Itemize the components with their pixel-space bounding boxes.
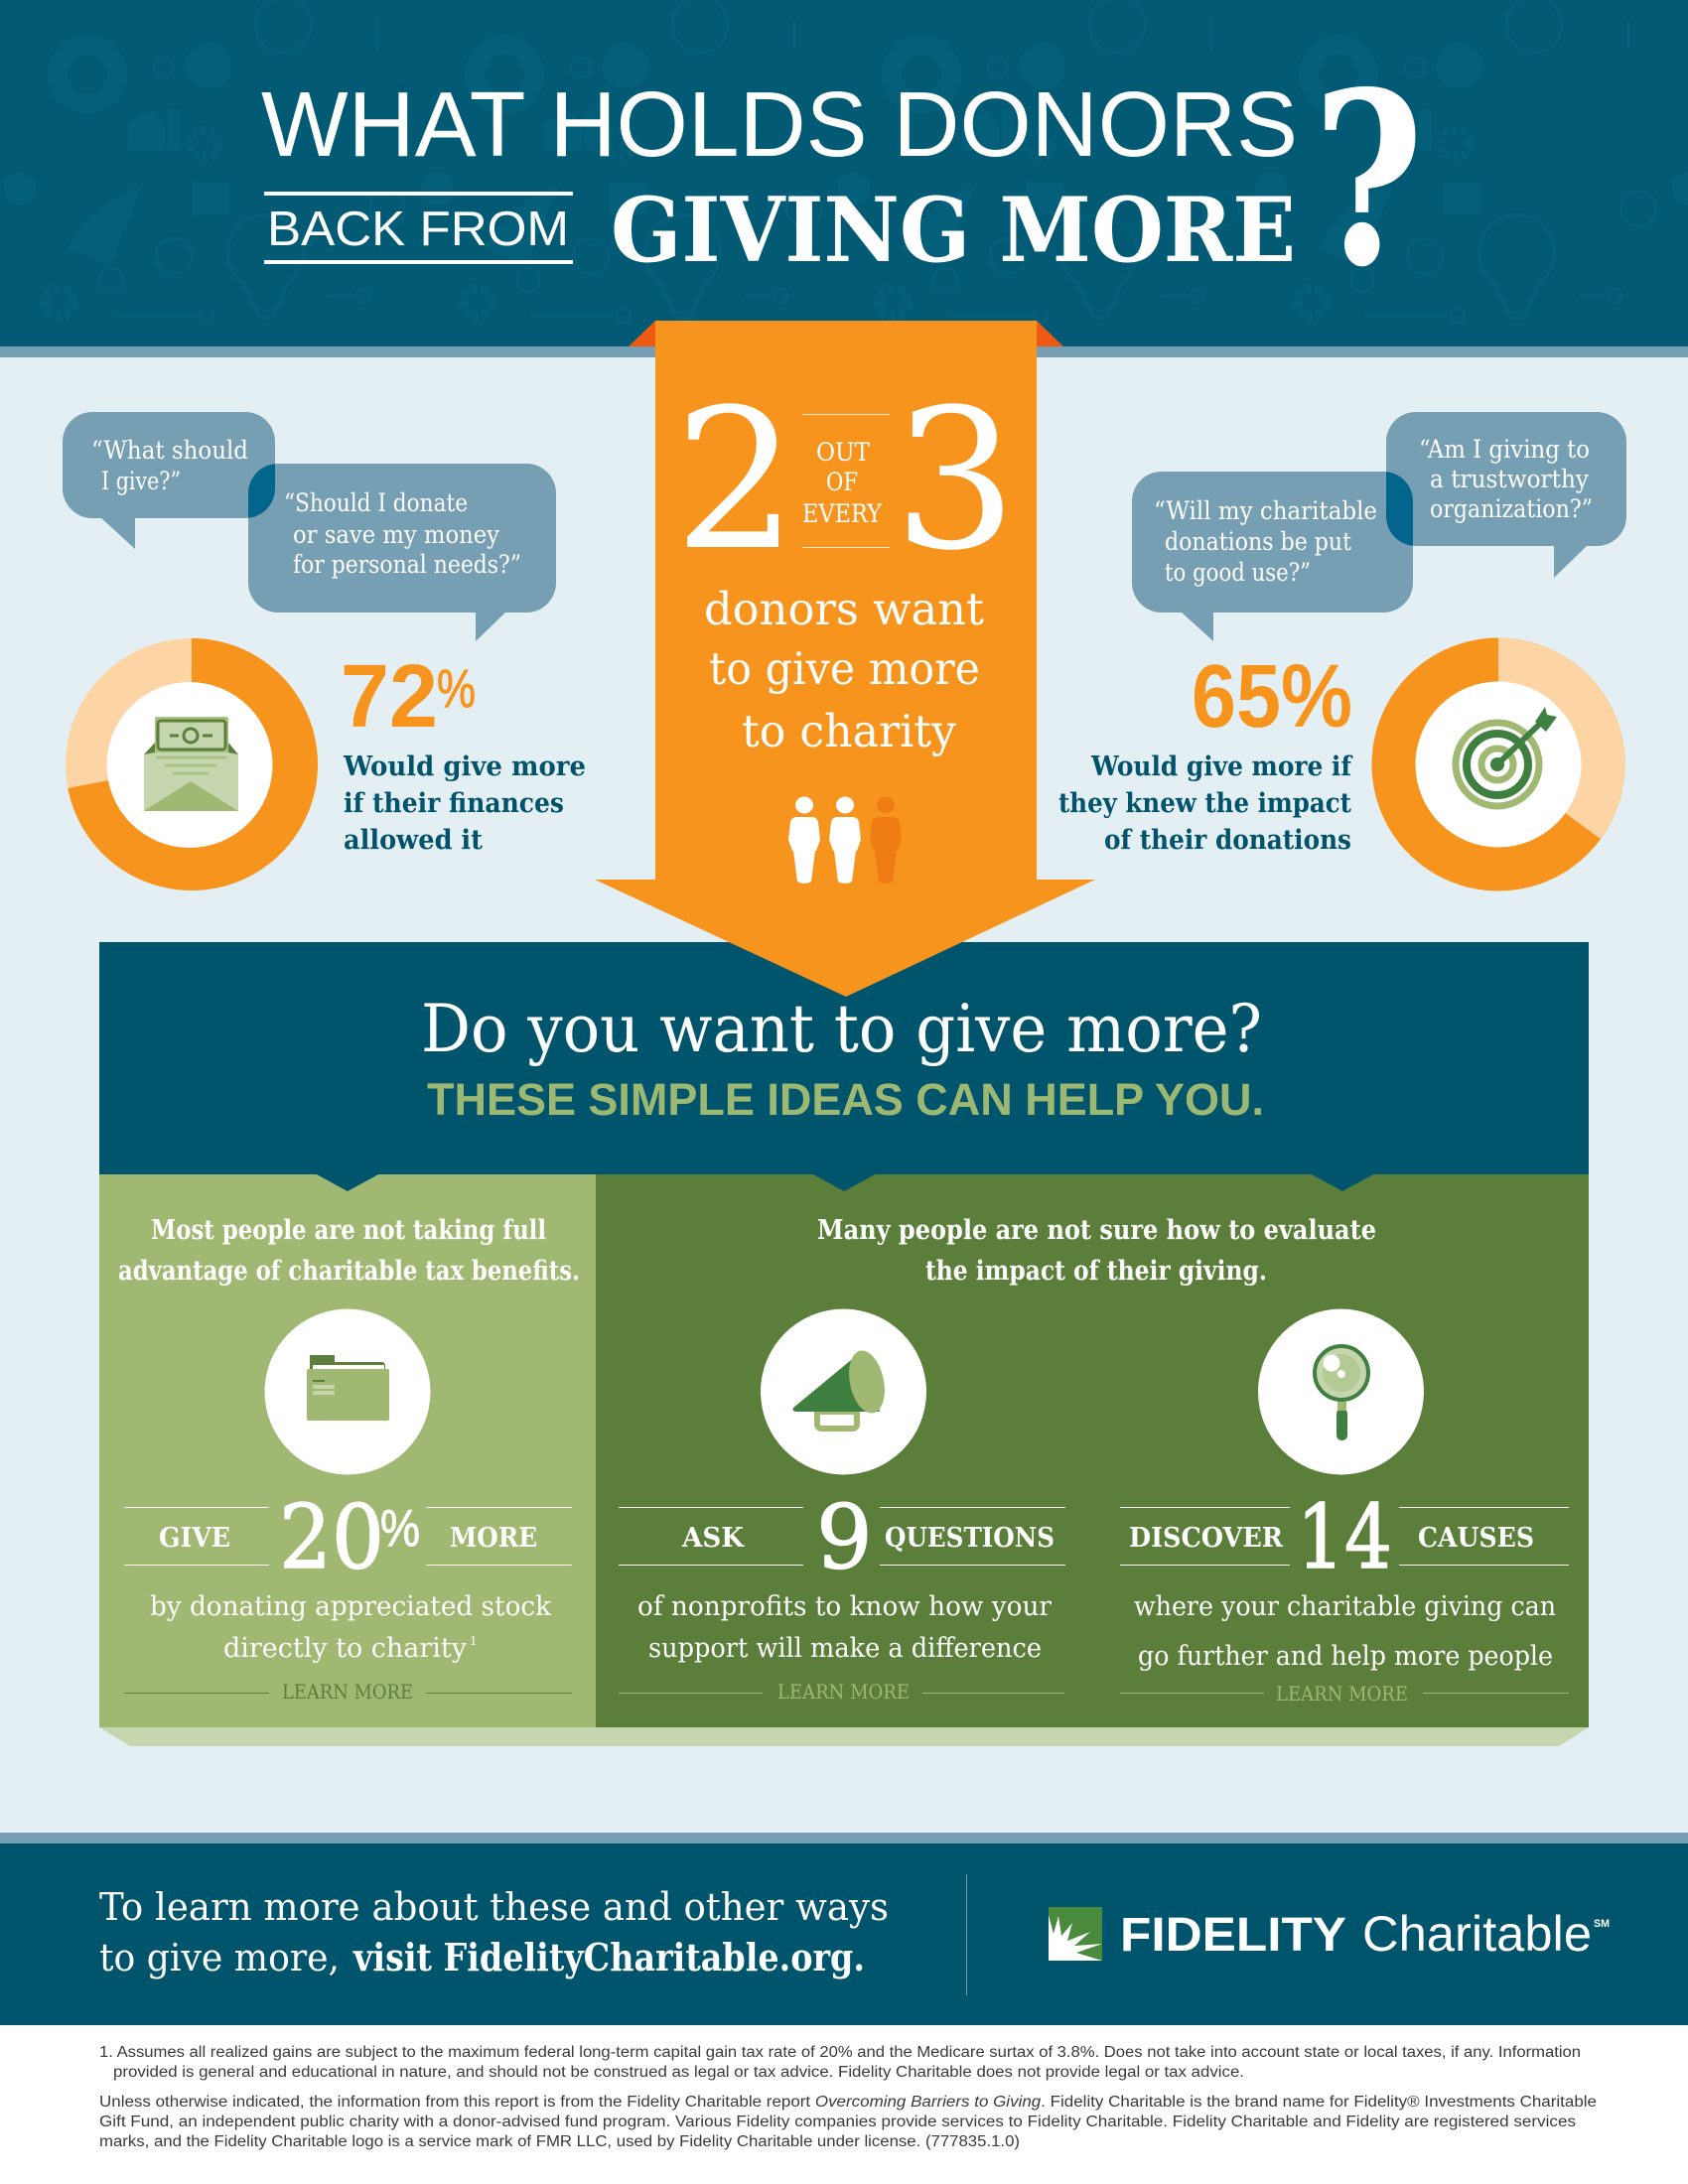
panel: do you want to give more: Do you want to give more? <box>421 991 1262 1067</box>
call to action <box>99 1885 889 1979</box>
donors want text: donors want <box>704 583 984 635</box>
icon: three people <box>788 796 902 884</box>
panel heading <box>118 1215 580 1287</box>
speech bubble: should I donate: for personal needs?” <box>293 550 521 579</box>
big number 2: 2 <box>674 367 797 593</box>
text: would give more if impact <box>1058 751 1353 856</box>
panel: tax benefits <box>99 1173 596 1727</box>
speech bubble: am I giving: organization?” <box>1430 494 1593 523</box>
logo: Fidelity Charitable: Charitable <box>1362 1906 1592 1962</box>
out of every label: EVERY <box>802 499 882 528</box>
stat: 65 percent: 65% <box>1192 647 1352 747</box>
body text: by donating appreciated stock <box>150 1591 552 1622</box>
speech bubble: what should I give: “What should <box>91 436 248 465</box>
ribbon fold left <box>629 321 655 346</box>
callout: discover 14 causes: 14 <box>1297 1485 1392 1588</box>
body text: 1 <box>470 1634 478 1648</box>
body text: support will make a difference <box>648 1633 1042 1664</box>
callout: discover 14 causes: DISCOVER <box>1129 1523 1284 1554</box>
call to action: visit FidelityCharitable.org. <box>352 1935 865 1979</box>
speech bubble: am I giving: a trustworthy <box>1430 465 1590 493</box>
speech bubble: am I giving <box>1386 412 1626 578</box>
speech bubble: am I giving: “Am I giving to <box>1419 435 1590 464</box>
stat: 72 percent: % <box>437 659 476 719</box>
callout: give 20 percent more: % <box>380 1500 420 1558</box>
callout: ask 9 questions: QUESTIONS <box>885 1523 1055 1554</box>
callout: discover 14 causes <box>1120 1485 1569 1588</box>
notch <box>315 1173 380 1191</box>
donors want text: to charity <box>742 705 957 757</box>
stat: 72 percent: 72 <box>341 647 438 747</box>
text: would give more if finances <box>343 751 586 856</box>
text: would give more if finances: if their finances <box>344 788 564 819</box>
speech bubble: should I donate: “Should I donate <box>284 488 468 517</box>
logo: Fidelity Charitable: SM <box>1594 1918 1610 1930</box>
body text <box>637 1591 1052 1664</box>
text: would give more if impact: Would give more if <box>1090 751 1353 782</box>
callout: give 20 percent more: MORE <box>450 1523 537 1554</box>
out of every label: OUT <box>816 438 870 467</box>
speech bubble: should I donate: or save my money <box>293 520 500 549</box>
donors want text <box>704 583 984 757</box>
icon: magnifying glass <box>1258 1308 1424 1475</box>
text: would give more if impact: they knew the impact <box>1058 788 1351 819</box>
out of every label: OF <box>826 468 858 496</box>
callout: give 20 percent more <box>124 1485 572 1588</box>
title: ? <box>1313 40 1424 320</box>
notches <box>811 1173 1375 1191</box>
title <box>261 40 1424 320</box>
footnotes panel: Unless otherwise indicated, the information from this report is from the Fidelity Charitable report Overcoming Barriers to Giving . Fidelity Charitable is the brand name for Fidelity® Investments Charitable <box>99 2094 1597 2111</box>
body text: where your charitable giving can <box>1134 1591 1556 1622</box>
out of every label <box>802 414 890 548</box>
speech bubble: will my charitable: donations be put <box>1165 527 1351 556</box>
footnotes panel: marks, and the Fidelity Charitable logo is a service mark of FMR LLC, used by Fidelity Charitable under license. (777835.1.0) <box>99 2133 1020 2150</box>
speech bubble: what should I give: I give?” <box>101 467 181 495</box>
panel base shadow <box>99 1727 1589 1746</box>
panel heading: advantage of charitable tax benefits. <box>118 1256 580 1287</box>
callout: ask 9 questions: 9 <box>816 1485 873 1588</box>
callout: discover 14 causes: CAUSES <box>1418 1523 1534 1554</box>
callout: give 20 percent more: 20 <box>279 1485 384 1588</box>
speech bubble: will my charitable <box>1132 472 1413 641</box>
panel heading <box>817 1215 1376 1287</box>
body text: go further and help more people <box>1138 1641 1553 1672</box>
icon: envelope with money <box>144 717 238 811</box>
text: would give more if finances: allowed it <box>344 825 483 856</box>
donut chart: 65 percent <box>1372 637 1624 891</box>
donut chart: 72 percent <box>66 638 318 890</box>
callout: ask 9 questions: ASK <box>681 1523 745 1554</box>
body text: of nonprofits to know how your <box>637 1591 1052 1622</box>
big number 3: 3 <box>894 367 1017 593</box>
text: would give more if finances: Would give more <box>343 751 586 782</box>
footnotes panel: provided is general and educational in nature, and should not be construed as legal or tax advice. Fidelity Charitable does not provide legal or tax advice. <box>113 2064 1244 2081</box>
panel: evaluate impact <box>596 1173 1589 1727</box>
text: would give more if impact: of their donations <box>1104 825 1351 856</box>
ribbon fold right <box>1037 321 1063 346</box>
title: WHAT HOLDS DONORS <box>261 72 1298 176</box>
footnotes panel: Gift Fund, an independent public charity with a donor-advised fund program. Various Fidelity companies provide services to Fidelity Charitable. Fidelity Charitable and Fidelity are registered services <box>99 2114 1576 2130</box>
panel: do you want to give more <box>99 942 1589 1174</box>
icon: folder <box>264 1308 431 1475</box>
logo: Fidelity Charitable <box>1049 1906 1610 1962</box>
icon: target with arrow <box>1456 707 1557 806</box>
footnotes panel: 1. Assumes all realized gains are subject to the maximum federal long-term capital gain tax rate of 20% and the Medicare surtax of 3.8%. Does not take into account state or local taxes, if any. Information <box>99 2044 1581 2061</box>
learn more link: LEARN MORE <box>1276 1682 1408 1706</box>
icon: megaphone <box>761 1308 926 1475</box>
panel heading: Most people are not taking full <box>151 1215 546 1246</box>
footer band <box>0 1833 1688 2025</box>
speech bubble: will my charitable: to good use?” <box>1165 558 1311 587</box>
orange arrow: 2 out of every 3 <box>595 321 1095 997</box>
body text: directly to charity <box>223 1633 468 1664</box>
title: GIVING MORE <box>611 178 1296 283</box>
logo: Fidelity Charitable: FIDELITY <box>1120 1909 1346 1962</box>
speech bubble: what should I give <box>63 412 275 549</box>
body text <box>1134 1591 1556 1672</box>
panel heading: the impact of their giving. <box>925 1256 1267 1287</box>
panel: do you want to give more: THESE SIMPLE IDEAS CAN HELP YOU. <box>427 1074 1264 1125</box>
call to action: To learn more about these and other ways <box>99 1885 889 1929</box>
speech bubble: should I donate <box>248 464 556 641</box>
panel heading: Many people are not sure how to evaluate <box>817 1215 1376 1246</box>
footnotes panel <box>0 2025 1688 2184</box>
body text <box>150 1591 552 1664</box>
speech bubble: will my charitable: “Will my charitable <box>1154 496 1377 525</box>
callout: give 20 percent more: GIVE <box>159 1523 230 1554</box>
callout: ask 9 questions <box>619 1485 1065 1588</box>
learn more link: LEARN MORE <box>282 1680 413 1704</box>
header banner <box>0 0 1688 357</box>
donors want text: to give more <box>709 642 980 695</box>
call to action: to give more, <box>99 1936 340 1979</box>
title: BACK FROM <box>267 203 569 256</box>
learn more link: LEARN MORE <box>777 1680 910 1704</box>
